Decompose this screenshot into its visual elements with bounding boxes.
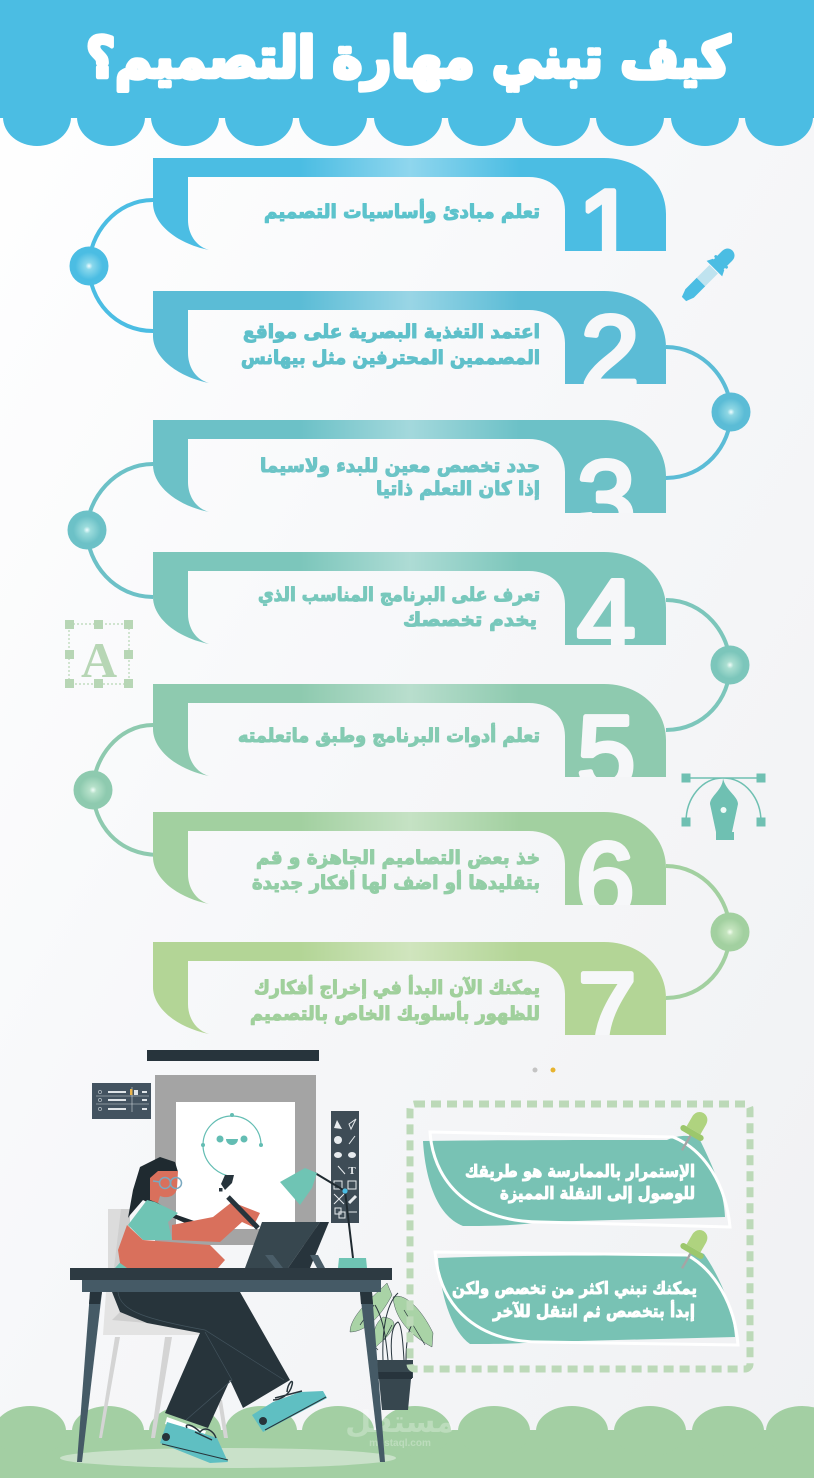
step 7 text: يمكنك الآن البدأ في إخراج أفكارك (254, 975, 540, 999)
step 7 text: للظهور بأسلوبك الخاص بالتصميم (250, 1001, 540, 1025)
person upper body (115, 1157, 260, 1268)
footer green scallops (0, 1406, 814, 1478)
step 7 card (153, 942, 666, 1035)
desk (70, 1268, 392, 1462)
step 7 number: 7 (578, 952, 636, 1069)
step 3 text (260, 455, 540, 500)
connector 4-5 (666, 600, 750, 730)
connector 5-6 (74, 725, 159, 855)
step 1 card (153, 158, 666, 251)
note 1 text: للوصول إلى النقلة المميزة (500, 1184, 695, 1204)
chair (99, 1209, 228, 1438)
step 2 card (153, 291, 666, 384)
pin 2 (671, 1225, 715, 1275)
step 4 text (258, 584, 540, 631)
step 4 text: يخدم تخصصك (403, 609, 537, 631)
step 4 card (153, 552, 666, 645)
step 4 text: تعرف على البرنامج المناسب الذي (258, 584, 540, 607)
note 1 text (465, 1162, 695, 1204)
note 2 text: يمكنك تبني اكثر من تخصص ولكن (452, 1279, 697, 1299)
step 6 number: 6 (576, 822, 634, 939)
header banner (0, 0, 814, 146)
step 6 text: خذ بعض التصاميم الجاهزة و قم (256, 847, 540, 869)
icon: pen tool (682, 774, 766, 840)
title: كيف تبني مهارة التصميم؟ (86, 26, 730, 91)
connector 1-2 (70, 200, 153, 331)
step 3 text: حدد تخصص معين للبدء ولاسيما (260, 455, 540, 477)
plant (350, 1283, 433, 1410)
connector 3-4 (68, 464, 153, 597)
note 1 (423, 1107, 730, 1227)
illustration: designer at desk (70, 1050, 392, 1463)
pants (112, 1292, 290, 1428)
connector 2-3 (666, 347, 750, 478)
tools panel (331, 1111, 359, 1223)
tablet (245, 1222, 329, 1268)
step 7 text (250, 975, 540, 1025)
note 2 text (452, 1279, 697, 1322)
step 5 text: تعلم أدوات البرنامج وطبق ماتعلمته (238, 723, 540, 747)
step 5 number: 5 (577, 695, 635, 812)
watermark: mostaql.com (369, 1438, 431, 1449)
note 2 (435, 1225, 738, 1345)
step 5 card (153, 684, 666, 777)
step 6 text: بتقليدها أو اضف لها أفكار جديدة (252, 870, 540, 894)
step 3 card (153, 420, 666, 513)
shoe back (252, 1381, 327, 1432)
step 6 text (252, 847, 540, 894)
smiley bezier drawing (201, 1113, 263, 1192)
step 1 text: تعلم مبادئ وأساسيات التصميم (264, 199, 540, 223)
ground shadow (60, 1448, 396, 1468)
connector 6-7 (666, 866, 750, 998)
step 3 text: إذا كان التعلم ذاتيا (376, 478, 540, 500)
icon: dropper (676, 243, 740, 307)
step 4 number: 4 (577, 559, 635, 676)
step 2 text: اعتمد التغذية البصرية على مواقع (243, 321, 540, 343)
pin 1 (671, 1107, 715, 1157)
step 6 card (153, 812, 666, 905)
step 1 number: 1 (578, 169, 636, 286)
note 2 text: إبدأ بتخصص ثم انتقل للآخر (492, 1300, 695, 1322)
step 2 text (241, 321, 540, 369)
layers panel (92, 1083, 151, 1119)
icon: letter A selection: A (81, 632, 117, 688)
step 3 number: 3 (577, 440, 635, 557)
lamp (280, 1168, 367, 1268)
canvas frame (155, 1075, 316, 1245)
decorative dots (532, 1068, 556, 1072)
tools panel: T (348, 1165, 356, 1177)
top dark bar (147, 1050, 319, 1061)
step 2 text: المصممين المحترفين مثل بيهانس (241, 347, 540, 369)
step 2 number: 2 (581, 295, 639, 412)
dotted frame (410, 1104, 750, 1369)
watermark: مستقل (345, 1405, 455, 1440)
shoe front (160, 1417, 228, 1463)
note 1 text: الإستمرار بالممارسة هو طريقك (465, 1162, 695, 1182)
icon: letter A selection (65, 620, 133, 688)
